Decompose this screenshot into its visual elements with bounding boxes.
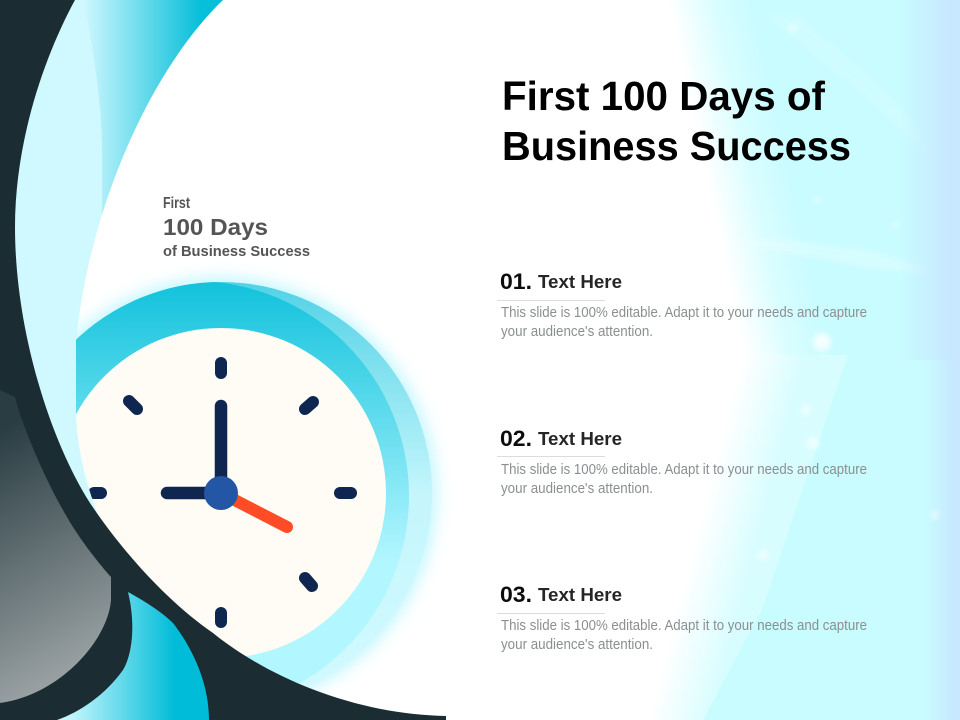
title: Business Success bbox=[502, 123, 851, 169]
minute hand bbox=[215, 406, 227, 493]
clock glow bbox=[6, 278, 436, 708]
hour ticks bbox=[94, 363, 351, 622]
item 02: Text Here bbox=[538, 429, 622, 449]
swoosh: light blue band bbox=[0, 0, 223, 520]
title: First 100 Days of bbox=[502, 73, 825, 119]
swoosh: dark navy body bbox=[0, 0, 446, 720]
inner ring bbox=[76, 282, 409, 684]
title bbox=[502, 73, 851, 169]
item 02: This slide is 100% editable. Adapt it to your needs and capture bbox=[501, 462, 867, 478]
item 02: your audience's attention. bbox=[501, 481, 653, 497]
item 02 bbox=[497, 426, 867, 497]
clock caption: First bbox=[163, 195, 190, 212]
item 01: your audience's attention. bbox=[501, 324, 653, 340]
item 01: This slide is 100% editable. Adapt it to your needs and capture bbox=[501, 305, 867, 321]
clock face bbox=[56, 328, 386, 658]
second hand bbox=[221, 493, 287, 527]
item 02: 02. bbox=[500, 426, 532, 451]
clock caption: 100 Days bbox=[163, 214, 268, 240]
clock caption: of Business Success bbox=[163, 243, 310, 260]
swoosh: cyan gradient bottom bbox=[57, 592, 209, 720]
clock caption bbox=[163, 195, 310, 260]
item 03: Text Here bbox=[538, 585, 622, 605]
clock bbox=[76, 270, 444, 692]
swoosh: grey gradient bbox=[0, 390, 111, 703]
item 03: your audience's attention. bbox=[501, 637, 653, 653]
item 03: This slide is 100% editable. Adapt it to your needs and capture bbox=[501, 618, 867, 634]
item 01: 01. bbox=[500, 269, 532, 294]
item 01 bbox=[497, 269, 867, 340]
outer ring bbox=[10, 282, 432, 704]
hub bbox=[204, 476, 238, 510]
item 03: 03. bbox=[500, 582, 532, 607]
item 01: Text Here bbox=[538, 272, 622, 292]
swoosh: cyan gradient top bbox=[88, 0, 223, 214]
hour hand bbox=[167, 487, 221, 499]
item 03 bbox=[497, 582, 867, 653]
